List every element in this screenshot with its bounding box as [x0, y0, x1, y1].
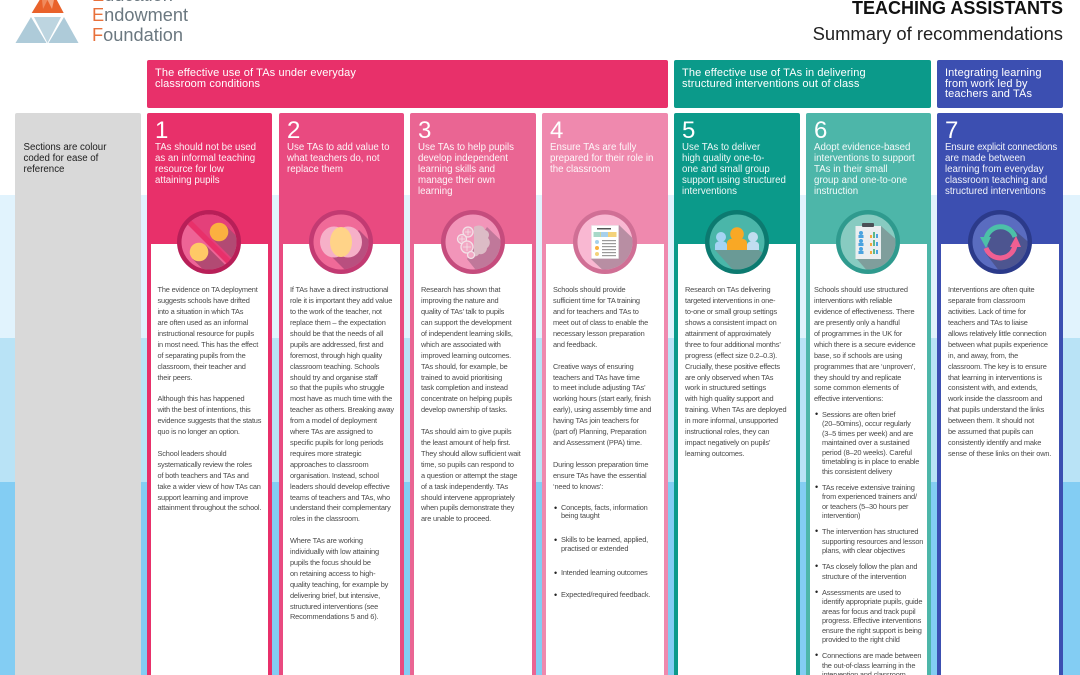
- heading 7: [945, 142, 1057, 197]
- white body panel 3: [414, 244, 532, 675]
- body text 4: sufficient time for TA training: [553, 296, 640, 305]
- body text 4: having TAs join teachers for: [553, 416, 639, 425]
- body text 4: teachers and TAs have time: [553, 373, 640, 382]
- body text 2: so that the pupils who struggle: [290, 383, 384, 392]
- number 6: 6: [814, 117, 827, 144]
- body text 2: understand their complementary: [290, 503, 391, 512]
- section header: structured interventions: [674, 60, 931, 108]
- heading 5: high quality one-to-: [682, 153, 764, 164]
- body text 4: ‘need to knows’:: [553, 482, 603, 491]
- body text 3: the least amount of help first.: [421, 438, 510, 447]
- body text 2: role it is important they add value: [290, 296, 392, 305]
- panel: recommendation 3: [410, 113, 536, 675]
- body text 4: working hours (start early, finish: [553, 394, 651, 403]
- bullet: assessments: Assessments are used to: [822, 588, 901, 596]
- body text 7: allows relatively little connection: [948, 329, 1046, 338]
- bullet: training: [815, 482, 917, 520]
- panel: recommendation 6: •: [815, 408, 818, 418]
- body text 3: quality of TAs’ talk to pupils: [421, 307, 504, 316]
- body text 3: [421, 285, 521, 523]
- white body panel 4: [546, 244, 664, 675]
- body text 1: The evidence on TA deployment: [158, 285, 258, 294]
- body text 7: [948, 285, 1051, 458]
- body text 4: Creative ways of ensuring: [553, 362, 634, 371]
- section header: structured interventions: The effective use of TAs in delivering: [682, 67, 866, 79]
- colour coding note text: coded for ease of: [24, 153, 98, 164]
- body text 1: with the best of intentions, this: [158, 405, 251, 414]
- heading 7: learning from everyday: [945, 164, 1044, 175]
- heading 5: one and small group: [682, 164, 770, 175]
- icon: separated pupils: [177, 210, 241, 274]
- body text 5: in more informal, unsupported: [685, 416, 778, 425]
- body text 3: They should allow sufficient wait: [421, 449, 520, 458]
- body text 4: During lesson preparation time: [553, 460, 648, 469]
- body text 5: are only observed when TAs: [685, 373, 773, 382]
- body text 2: teams of teachers and TAs, who: [290, 493, 390, 502]
- body text 7: sense of these links on their own.: [948, 449, 1051, 458]
- body text 2: teacher as others. Breaking away: [290, 405, 394, 414]
- section header: everyday classroom conditions: [147, 60, 668, 108]
- bullet: sessions: (3–5 times per week) and are: [822, 428, 913, 438]
- number 2: 2: [287, 117, 300, 144]
- body text 1: classroom, their teacher and: [158, 362, 246, 371]
- number 4: 4: [550, 117, 563, 144]
- number 7: 7: [945, 117, 958, 144]
- bullet: concepts: being taught: [561, 511, 600, 520]
- body text 1: Although this has happened: [158, 394, 244, 403]
- number 3: 3: [418, 117, 431, 144]
- white body panel 2: [283, 244, 400, 675]
- body text 4: and for teachers and TAs to: [553, 307, 639, 316]
- body text 7: that pupils understand the links: [948, 405, 1044, 414]
- heading 7: Ensure explicit connections: [945, 142, 1057, 153]
- heading 6: TAs in their small: [814, 164, 888, 175]
- body text 2: Recommendations 5 and 6).: [290, 612, 378, 621]
- section header: integrating learning: [937, 60, 1063, 108]
- body text 2: where TAs are assigned to: [290, 427, 373, 436]
- heading 3: learning skills and: [418, 164, 495, 175]
- body text 4: (part of) Planning, Preparation: [553, 427, 646, 436]
- panel: recommendation 4: •: [554, 568, 557, 578]
- heading 7: are made between: [945, 153, 1025, 164]
- body text 3: TAs should aim to give pupils: [421, 427, 511, 436]
- body text 3: when pupils demonstrate they: [421, 503, 514, 512]
- logo wordmark: Endowment: [92, 5, 188, 25]
- heading 4: Ensure TAs are fully: [550, 142, 636, 153]
- section header: everyday classroom conditions: classroom conditions: [155, 78, 260, 90]
- body text 2: on retaining access to high-: [290, 569, 375, 578]
- section header: structured interventions: structured interventions out of class: [682, 78, 859, 90]
- bullet: follow plan: [815, 561, 917, 580]
- body text 4: early), using assembly time and: [553, 405, 651, 414]
- bullet: follow plan: TAs closely follow the plan and: [822, 562, 917, 571]
- bullet: assessments: provided to the right child: [822, 635, 900, 644]
- body text 6: which there is a secure evidence: [814, 340, 915, 349]
- body text 1: evidence suggests that the status: [158, 416, 261, 425]
- heading 6: instruction: [814, 186, 858, 197]
- bullet: sessions: this consistent delivery: [822, 466, 892, 476]
- icon: lesson plan: [573, 210, 637, 274]
- body text 5: three to four additional months’: [685, 340, 781, 349]
- body text 4: and Assessment (PPA) time.: [553, 438, 642, 447]
- body text 2: pupils the focus should be: [290, 558, 371, 567]
- panel: recommendation 7: [937, 113, 1063, 675]
- bullet: assessments: ensure the right support is being: [822, 626, 922, 634]
- body text 1: instructional resource for pupils: [158, 329, 254, 338]
- heading 5: [682, 142, 786, 197]
- white body panel 7: [941, 244, 1059, 675]
- body text 6: programmes that are ‘unproven’,: [814, 362, 915, 371]
- body text 7: activities. Lack of time for: [948, 307, 1026, 316]
- body text 6: Schools should use structured: [814, 285, 908, 294]
- bullet: connections: Connections are made between: [822, 651, 921, 660]
- body text 2: classroom teaching. Schools: [290, 362, 379, 371]
- icon: overlapping circles: [309, 210, 373, 274]
- body text 1: into a situation in which TAs: [158, 307, 243, 316]
- bullet: sessions: (20–50mins), occur regularly: [822, 419, 911, 428]
- body text 1: of separating pupils from the: [158, 351, 246, 360]
- logo mark: [16, 0, 78, 43]
- heading 6: group and one-to-one: [814, 175, 907, 186]
- body text 5: targeted interventions in one-: [685, 296, 775, 305]
- panel: recommendation 2: [279, 113, 404, 675]
- panel: recommendation 6: •: [815, 561, 818, 571]
- body text 2: roles in the classroom.: [290, 514, 360, 523]
- heading 1: as an informal teaching: [155, 153, 255, 164]
- body text 4: Schools should provide: [553, 285, 625, 294]
- body text 3: TAs should, for example, be: [421, 362, 508, 371]
- bullet: outcomes: Intended learning outcomes: [561, 568, 648, 577]
- body text 3: task completion and instead: [421, 383, 508, 392]
- bullet: sessions: [815, 408, 919, 476]
- body text 1: in most need. This has the effect: [158, 340, 258, 349]
- colour coding note text: Sections are colour: [24, 142, 106, 153]
- panel: recommendation 6: •: [815, 586, 818, 596]
- body text 5: impact negatively on pupils’: [685, 438, 770, 447]
- bullet: feedback: Expected/required feedback.: [561, 590, 650, 598]
- body text 2: approaches to classroom: [290, 460, 368, 469]
- bullet: connections: [815, 650, 921, 675]
- body text 6: effective interventions:: [814, 394, 883, 403]
- body text 3: are unable to proceed.: [421, 514, 491, 523]
- body text 7: consistent with, and extends,: [948, 383, 1038, 392]
- body text 7: that learning in interventions is: [948, 373, 1042, 382]
- body text 3: improved learning outcomes.: [421, 351, 511, 360]
- bullet: skills: practised or extended: [561, 544, 628, 553]
- bullet: assessments: [815, 586, 922, 644]
- body text 3: concentrate on helping pupils: [421, 394, 512, 403]
- body text 7: separate from classroom: [948, 296, 1025, 305]
- body text 3: which are associated with: [421, 340, 501, 349]
- body text 7: in, and away, from, the: [948, 351, 1018, 360]
- heading 6: interventions to support: [814, 153, 915, 164]
- logo wordmark: Foundation: [92, 25, 183, 45]
- bullet: resources: The intervention has structured: [822, 527, 918, 536]
- body text 6: evidence of effectiveness. There: [814, 307, 914, 316]
- body text 3: Research has shown that: [421, 285, 500, 294]
- bullet: training: TAs receive extensive training: [822, 482, 915, 492]
- bullet: skills: [554, 535, 648, 553]
- body text 3: time, so pupils can respond to: [421, 460, 514, 469]
- heading 2: Use TAs to add value to: [287, 142, 390, 153]
- body text 3: develop ownership of tasks.: [421, 405, 507, 414]
- body text 5: attainment of approximately: [685, 329, 771, 338]
- body text 3: should intervene appropriately: [421, 493, 515, 502]
- body text 3: of a task independently. TAs: [421, 482, 508, 491]
- icon: circular arrows: [968, 210, 1032, 274]
- body text 7: between what pupils experience: [948, 340, 1048, 349]
- body text 2: requires more strategic: [290, 449, 361, 458]
- heading 4: prepared for their role in: [550, 153, 653, 164]
- body text 1: take a wider view of how TAs can: [158, 482, 261, 491]
- body text 6: of programmes in the UK for: [814, 329, 902, 338]
- body text 2: If TAs have a direct instructional: [290, 285, 388, 294]
- icon: clipboard with charts: [836, 210, 900, 274]
- body text 2: most have as much time with the: [290, 394, 392, 403]
- body text 7: between them. It should not: [948, 416, 1034, 425]
- colour coding note text: [24, 142, 106, 175]
- panel: recommendation 6: •: [815, 526, 818, 536]
- heading 6: [814, 142, 915, 197]
- body text 2: delivering brief, but intensive,: [290, 591, 380, 600]
- panel: recommendation 6: [806, 113, 931, 675]
- heading 2: replace them: [287, 164, 343, 175]
- body text 6: [814, 285, 916, 403]
- bullet: concepts: Concepts, facts, information: [561, 502, 648, 512]
- section header: integrating learning: teachers and TAs: [945, 88, 1032, 100]
- panel: recommendation 1: [147, 113, 272, 675]
- icons layer: [177, 210, 1032, 274]
- body text 1: their peers.: [158, 373, 192, 382]
- bullet: sessions: maintained over a sustained: [822, 438, 910, 447]
- bullet: training: or teachers (5–30 hours per: [822, 502, 908, 510]
- bullet: assessments: areas for focus and track pupil: [822, 606, 915, 616]
- body text 2: to the work of the teacher, not: [290, 307, 382, 316]
- body text 6: base, so if schools are using: [814, 351, 902, 360]
- body text 7: be assumed that pupils can: [948, 427, 1033, 436]
- heading 3: manage their own: [418, 175, 495, 186]
- panel: recommendation 4: •: [554, 590, 557, 600]
- logo: Education Endowment Foundation: [16, 0, 188, 45]
- body text 4: ensure TAs have the essential: [553, 471, 647, 480]
- heading 3: learning: [418, 186, 452, 197]
- heading 4: [550, 142, 653, 175]
- body text 5: with high quality support and: [685, 394, 773, 403]
- background colour bands: [0, 195, 1080, 675]
- body text 1: [158, 285, 262, 512]
- body text 4: to meet include adjusting TAs’: [553, 383, 646, 392]
- subtitle: Summary of recommendations: [813, 23, 1063, 44]
- white body panel 5: [678, 244, 796, 675]
- bullet: sessions: period (8–20 weeks). Careful: [822, 448, 912, 456]
- heading 1: [155, 142, 256, 186]
- body text 1: are often used as an informal: [158, 318, 248, 327]
- body text 5: learning outcomes.: [685, 449, 744, 458]
- heading 1: attaining pupils: [155, 175, 220, 186]
- bullet: sessions: Sessions are often brief: [822, 410, 895, 418]
- body text 2: specific pupils for long periods: [290, 438, 383, 447]
- logo wordmark: [92, 0, 188, 45]
- heading 2: what teachers do, not: [287, 153, 380, 164]
- heading 1: TAs should not be used: [155, 142, 256, 153]
- body text 3: a question or attempt the stage: [421, 471, 517, 480]
- bullet: follow plan: structure of the intervention: [822, 572, 906, 580]
- body text 5: work in structured settings: [685, 383, 766, 392]
- panel: recommendation 5: [674, 113, 800, 675]
- section header: integrating learning: from work led by: [945, 78, 1028, 90]
- body text 3: improving the nature and: [421, 296, 498, 305]
- heading 7: classroom teaching and: [945, 175, 1047, 186]
- body text 6: are presently only a handful: [814, 318, 900, 327]
- body text 5: shows a consistent impact on: [685, 318, 776, 327]
- bullet: training: from experienced trainers and/: [822, 492, 917, 501]
- body text 5: Research on TAs delivering: [685, 285, 770, 294]
- body text 2: from a model of deployment: [290, 416, 377, 425]
- body text 2: quality teaching, for example by: [290, 580, 388, 589]
- body text 7: work inside the classroom and: [948, 394, 1042, 403]
- body text 2: structured interventions (see: [290, 602, 378, 611]
- body text 5: Crucially, these positive effects: [685, 362, 780, 371]
- body text 1: systematically review the roles: [158, 460, 252, 469]
- bullet: resources: plans, with clear objectives: [822, 546, 905, 555]
- section header: everyday classroom conditions: The effective use of TAs under everyday: [155, 67, 356, 79]
- body text 1: attainment throughout the school.: [158, 503, 261, 512]
- body text 6: some common elements of: [814, 383, 899, 392]
- heading 7: structured interventions: [945, 186, 1046, 197]
- body text 7: classroom. The key is to ensure: [948, 362, 1047, 371]
- body text 7: Interventions are often quite: [948, 285, 1034, 294]
- body text 1: support learning and improve: [158, 493, 248, 502]
- body text 2: leaders should develop effective: [290, 482, 390, 491]
- body text 2: should be that the needs of all: [290, 329, 383, 338]
- body text 4: meet out of class to enable the: [553, 318, 648, 327]
- bullet: resources: [815, 526, 923, 555]
- body text 1: quo is no longer an option.: [158, 427, 240, 436]
- body text 5: progress (effect size 0.2–0.3).: [685, 351, 777, 360]
- body text 5: to-one or small group settings: [685, 307, 777, 316]
- body text 2: pupils are addressed, first and: [290, 340, 383, 349]
- panel: recommendation 4: •: [554, 535, 557, 545]
- body text 3: can support the development: [421, 318, 511, 327]
- bullet: training: intervention): [822, 511, 860, 520]
- body text 1: suggests schools have drifted: [158, 296, 250, 305]
- body text 2: organisation. Instead, school: [290, 471, 379, 480]
- panel: recommendation 4: [542, 113, 668, 675]
- body text 6: interventions with reliable: [814, 296, 892, 305]
- panel: colour coding note: [15, 113, 141, 675]
- bullet: assessments: progress. Effective interventions: [822, 616, 921, 625]
- bullet: concepts: [554, 502, 648, 520]
- bullet: sessions: timetabling is in place to enable: [822, 457, 919, 466]
- panel: recommendation 6: •: [815, 482, 818, 492]
- body text 2: should try and organise staff: [290, 373, 378, 382]
- bullet: assessments: identify appropriate pupils, guide: [822, 597, 922, 606]
- body text 1: of both teachers and TAs and: [158, 471, 249, 480]
- colour coding note text: reference: [24, 164, 64, 175]
- heading 1: resource for low: [155, 164, 224, 175]
- heading 2: [287, 142, 390, 175]
- panel: recommendation 4: •: [554, 502, 557, 512]
- heading 4: the classroom: [550, 164, 610, 175]
- body text 1: School leaders should: [158, 449, 226, 458]
- body text 2: [290, 285, 394, 621]
- body text 5: [685, 285, 786, 458]
- bullet: skills: Skills to be learned, applied,: [561, 535, 648, 544]
- white body panel 6: [810, 244, 927, 675]
- body text 2: Where TAs are working: [290, 536, 363, 545]
- number 5: 5: [682, 117, 695, 144]
- body text 4: [553, 285, 651, 491]
- heading 3: [418, 142, 514, 197]
- white body panel 1: [151, 244, 268, 675]
- body text 5: training. When TAs are deployed: [685, 405, 786, 414]
- body text 7: consistently identify and make: [948, 438, 1041, 447]
- heading 5: Use TAs to deliver: [682, 142, 760, 153]
- heading 3: Use TAs to help pupils: [418, 142, 514, 153]
- body text 2: foremost, through high quality: [290, 351, 382, 360]
- icon: brain with gears: [441, 210, 505, 274]
- section header: integrating learning: Integrating learning: [945, 67, 1042, 79]
- heading 3: develop independent: [418, 153, 508, 164]
- body text 3: of independent learning skills,: [421, 329, 513, 338]
- body text 2: replace them – the expectation: [290, 318, 386, 327]
- body text 4: necessary lesson preparation: [553, 329, 645, 338]
- heading 5: support using structured: [682, 175, 786, 186]
- body text 5: instructional roles, they can: [685, 427, 769, 436]
- body text 3: trained to avoid prioritising: [421, 373, 502, 382]
- heading 6: Adopt evidence-based: [814, 142, 910, 153]
- bullet: connections: the out-of-class learning in the: [822, 660, 915, 670]
- icon: group of people: [705, 210, 769, 274]
- body text 6: they should try and replicate: [814, 373, 901, 382]
- body text 7: teachers and TAs to liaise: [948, 318, 1028, 327]
- panel: recommendation 6: •: [815, 650, 818, 660]
- body text 4: and feedback.: [553, 340, 597, 349]
- heading 5: interventions: [682, 186, 737, 197]
- body text 2: individually with low attaining: [290, 547, 379, 556]
- number 1: 1: [155, 117, 168, 144]
- bullet: resources: supporting resources and lesson: [822, 536, 923, 546]
